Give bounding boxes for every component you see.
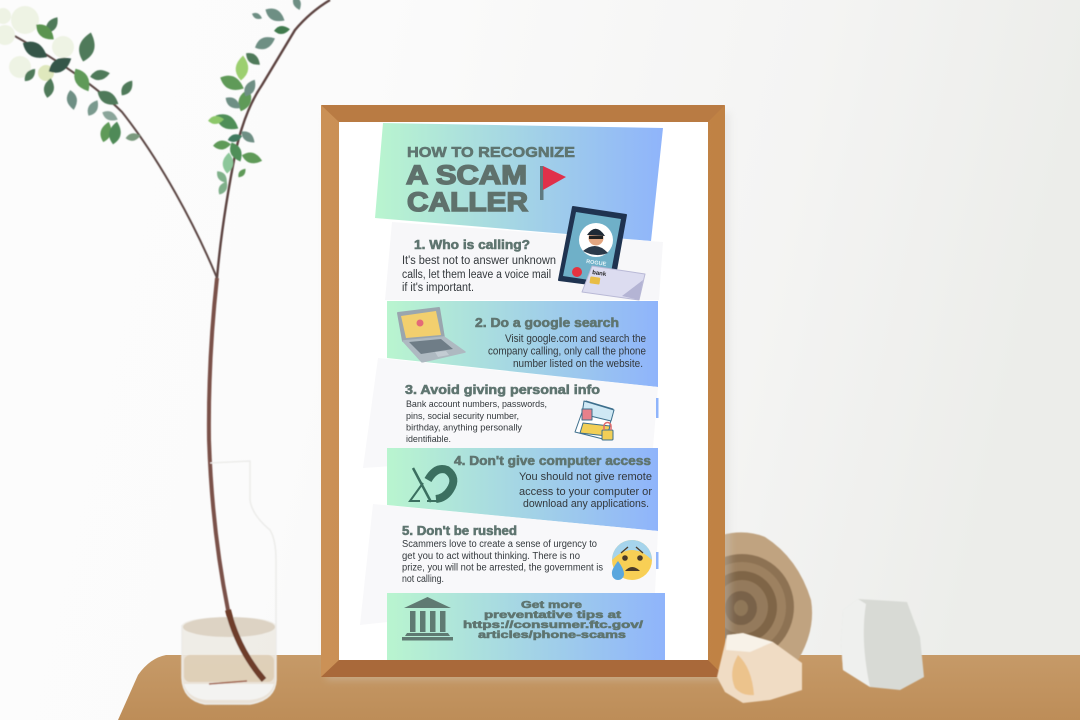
closing text: articles/phone-scams — [478, 629, 626, 641]
title: a scam caller — [406, 160, 528, 217]
body 5: Scammers love to create a sense of urgency to — [402, 539, 598, 550]
body 4 — [519, 471, 652, 510]
body 1: calls, let them leave a voice mail — [402, 269, 551, 281]
icon: warning magnet — [410, 468, 453, 502]
icon: laptop — [398, 308, 465, 362]
right branch — [217, 0, 330, 278]
body 3: identifiable. — [406, 434, 451, 445]
heading 3: 3. Avoid giving personal info — [405, 382, 600, 397]
body 5: get you to act without thinking. There is no — [402, 551, 581, 562]
body 5: prize, you will not be arrested, the government is — [402, 562, 603, 574]
heading 5: 5. Don't be rushed — [402, 524, 517, 538]
body 5: not calling. — [402, 574, 444, 585]
body 1: It's best not to answer unknown — [402, 255, 556, 267]
flower clusters — [0, 6, 74, 81]
title: a scam caller: CALLER — [407, 187, 528, 217]
body 3: pins, social security number, — [406, 411, 519, 422]
body 2 — [488, 333, 646, 370]
panel 6: more tips — [387, 593, 665, 660]
white rock — [841, 599, 924, 690]
body 2: Visit google.com and search the — [505, 333, 646, 345]
body 5 — [402, 539, 603, 585]
body 2: company calling, only call the phone — [488, 346, 646, 358]
frame shadow — [326, 112, 730, 680]
body 4: download any applications. — [523, 498, 649, 510]
body 3: birthday, anything personally — [406, 422, 522, 434]
body 3 — [406, 399, 547, 445]
closing text: Get more — [521, 599, 582, 611]
icon: red flag — [540, 166, 566, 200]
blue sliver — [656, 398, 658, 418]
heading 1: 1. Who is calling? — [414, 237, 530, 252]
body 3: Bank account numbers, passwords, — [406, 399, 547, 410]
wooden table — [118, 655, 1080, 720]
panel 1: who is calling — [385, 222, 663, 300]
title line 1: HOW TO RECOGNIZE — [407, 144, 575, 161]
panel 4: computer access — [387, 448, 658, 531]
icon: anxious face emoji — [612, 540, 652, 580]
orange rock — [717, 633, 802, 703]
poster panel: header — [375, 123, 663, 241]
icon: phone with rogue caller and bank card — [559, 207, 645, 300]
blue sliver — [656, 552, 658, 569]
icon: phone with rogue caller and bank card: ROGUE — [586, 259, 607, 268]
plant branches — [0, 0, 330, 680]
main stem — [209, 278, 264, 680]
closing text — [463, 599, 643, 641]
picture frame — [321, 105, 730, 680]
icon: documents with padlock — [575, 401, 614, 440]
body 4: access to your computer or — [519, 486, 652, 498]
body 4: You should not give remote — [519, 471, 652, 483]
closing text: preventative tips at — [484, 609, 622, 621]
wood slab decoration — [690, 532, 812, 660]
panel 5: don't be rushed — [360, 504, 658, 625]
heading 2: 2. Do a google search — [475, 316, 619, 330]
body 1: if it's important. — [402, 282, 474, 294]
panel 2: google search — [387, 301, 658, 387]
closing text: https://consumer.ftc.gov/ — [463, 619, 643, 631]
glass vase — [182, 461, 276, 704]
panel 3: personal info — [363, 358, 658, 468]
icon: phone with rogue caller and bank card: bank — [592, 270, 607, 278]
left branch — [0, 28, 217, 278]
water — [182, 617, 276, 704]
icon: bank building — [402, 597, 453, 640]
leaves — [19, 0, 303, 196]
body 1 — [402, 255, 556, 294]
title: a scam caller: A SCAM — [406, 160, 527, 190]
heading 4: 4. Don't give computer access — [454, 454, 651, 468]
body 2: number listed on the website. — [513, 358, 643, 370]
frame body — [321, 105, 725, 677]
